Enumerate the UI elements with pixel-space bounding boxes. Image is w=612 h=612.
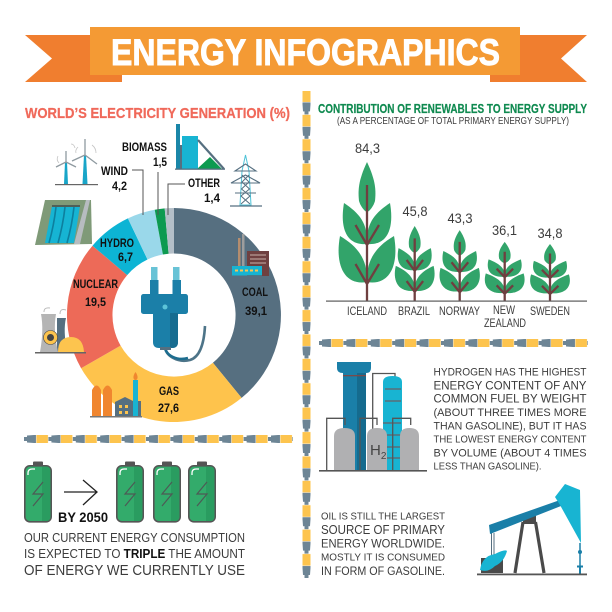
country labels: NORWAY [439, 306, 480, 318]
segment: hydro [92, 218, 148, 275]
label: nuclear: NUCLEAR [73, 277, 118, 291]
values [355, 140, 563, 241]
plant: sweden [530, 244, 570, 301]
values: 36,1 [492, 222, 517, 238]
divider: vertical chain [302, 91, 311, 578]
text: hydrogen: ENERGY CONTENT OF ANY [434, 380, 587, 392]
leader lines [132, 170, 185, 215]
icon: power pylon [230, 155, 262, 206]
title: ENERGY INFOGRAPHICS [111, 31, 500, 73]
label: hydro [100, 236, 134, 264]
label: gas [158, 384, 179, 415]
text: hydrogen [434, 367, 587, 472]
icon: three batteries [117, 462, 215, 522]
label: biomass: 1,5 [153, 155, 167, 169]
values: 34,8 [538, 225, 563, 241]
values: 84,3 [355, 140, 380, 156]
label: wind: WIND [101, 164, 128, 178]
country labels: SWEDEN [530, 306, 570, 318]
text: hydrogen: THAN GASOLINE), BUT IT HAS [434, 420, 586, 432]
text: oil: SOURCE OF PRIMARY [321, 523, 446, 537]
country labels [347, 305, 570, 330]
text: consumption: IS EXPECTED TO TRIPLE THE AMOUNT [24, 547, 245, 561]
label: nuclear: 19,5 [85, 295, 106, 309]
icon: hydrogen plant [319, 362, 427, 472]
text: hydrogen: HYDROGEN HAS THE HIGHEST [434, 367, 587, 379]
text: oil [321, 510, 446, 578]
icon: wind turbines [55, 139, 98, 185]
icon: biomass plant [175, 124, 225, 170]
icon: hydrogen plant: H [370, 442, 381, 459]
divider: right horizontal chain [319, 338, 588, 348]
segment: nuclear [67, 246, 127, 368]
label: other: 1,4 [204, 191, 220, 205]
heading: world's electricity generation: WORLD’S ELECTRICITY GENERATION (%) [25, 105, 290, 122]
label: nuclear [73, 277, 118, 309]
icon: oil pump [477, 484, 587, 575]
icon: coal plant [232, 234, 269, 276]
country labels: NEW [493, 305, 515, 317]
icon: gas plant [90, 372, 142, 418]
text: oil: ENERGY WORLDWIDE. [321, 538, 445, 550]
plant: brazil [395, 226, 435, 301]
icon: hydrogen plant: 2 [381, 451, 387, 462]
divider: left horizontal chain [24, 434, 293, 444]
segment: gas [81, 346, 242, 422]
label: coal: COAL [242, 285, 268, 299]
title banner [25, 27, 587, 82]
text: hydrogen: LESS THAN GASOLINE). [434, 460, 542, 472]
plant: iceland [339, 162, 395, 301]
text: hydrogen: THE LOWEST ENERGY CONTENT [434, 434, 587, 446]
label: other [188, 176, 220, 205]
text: hydrogen: COMMON FUEL BY WEIGHT [434, 394, 586, 406]
text: consumption: OUR CURRENT ENERGY CONSUMPTION [24, 531, 245, 545]
text: hydrogen: BY VOLUME (ABOUT 4 TIMES [434, 448, 586, 460]
segment: wind [128, 210, 163, 260]
country labels: BRAZIL [398, 306, 430, 318]
country labels: ICELAND [347, 306, 387, 318]
text: consumption: OF ENERGY WE CURRENTLY USE [24, 563, 245, 579]
values: 45,8 [402, 203, 428, 219]
text: oil: OIL IS STILL THE LARGEST [321, 510, 446, 522]
values: 43,3 [448, 210, 473, 226]
text: oil: IN FORM OF GASOLINE. [321, 566, 445, 578]
icon: single battery [25, 462, 51, 522]
segment: coal [174, 208, 281, 398]
label: biomass [122, 140, 167, 169]
label: hydro: HYDRO [100, 236, 134, 250]
label: wind [101, 164, 128, 193]
label: other: OTHER [188, 176, 220, 190]
arrow [64, 480, 97, 505]
country labels: ZEALAND [484, 318, 526, 330]
segment: biomass [155, 208, 169, 254]
plant: norway [440, 230, 480, 301]
label: wind: 4,2 [112, 179, 127, 193]
plant chart [326, 162, 587, 302]
label: coal: 39,1 [245, 304, 267, 318]
label: gas: 27,6 [158, 401, 179, 415]
icon: hydro dam [35, 200, 92, 245]
label: gas: GAS [159, 384, 179, 398]
label: by 2050: BY 2050 [58, 509, 108, 525]
plant: new zealand [485, 242, 525, 301]
label: hydro: 6,7 [118, 250, 133, 264]
label: biomass: BIOMASS [122, 140, 167, 154]
donut chart [67, 208, 281, 422]
label: coal [242, 285, 268, 318]
text: hydrogen: (ABOUT THREE TIMES MORE [434, 407, 586, 419]
icon: nuclear plant [35, 308, 86, 354]
text: consumption [24, 531, 245, 579]
text: oil: MOSTLY IT IS CONSUMED [321, 552, 445, 564]
icon: plug [141, 267, 205, 361]
segment: other [165, 208, 174, 254]
